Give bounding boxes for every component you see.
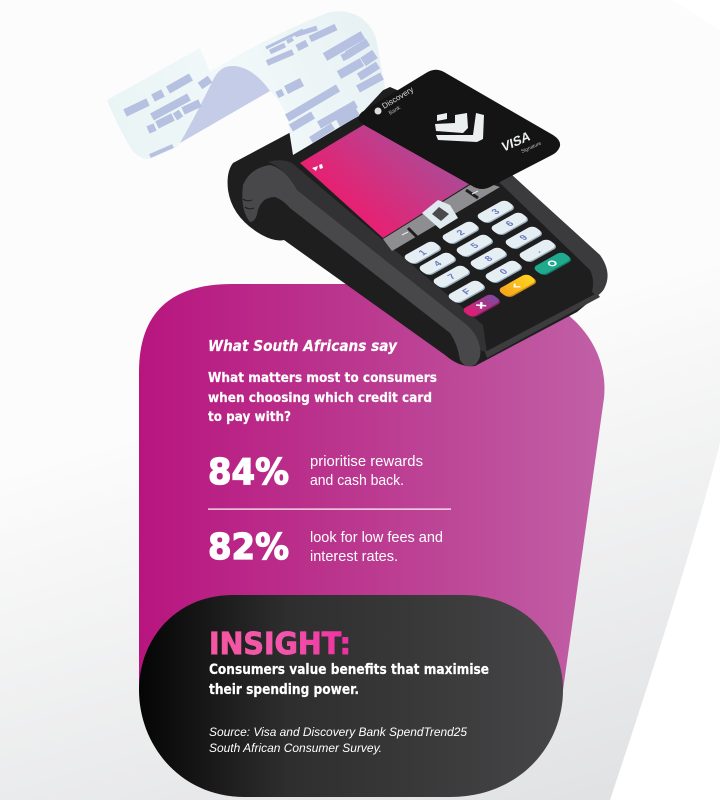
stat: 84 percent: and cash back.: [310, 473, 404, 489]
navigation pad: [422, 200, 458, 229]
question text: What matters most to consumers: [208, 370, 437, 386]
question text: when choosing which credit card: [208, 390, 432, 406]
keypad: 0: [497, 267, 511, 277]
insight text: [209, 662, 489, 698]
keypad: 7: [445, 272, 459, 282]
heading: insight: INSIGHT:: [209, 627, 351, 662]
question text: [208, 370, 437, 425]
stat: 82 percent: look for low fees and: [310, 530, 443, 546]
keypad: 8: [482, 254, 496, 264]
card bank name: [374, 85, 415, 117]
terminal screen: [300, 118, 495, 238]
panel: magenta survey card: [139, 284, 604, 690]
keypad: F: [460, 287, 474, 297]
keypad: .: [532, 247, 544, 255]
card bank name: Bank: [388, 105, 402, 117]
source note: Source: Visa and Discovery Bank SpendTrend25: [209, 727, 468, 739]
keypad: 5: [468, 241, 482, 251]
illustration: printed receipt: [107, 11, 385, 159]
question text: to pay with?: [208, 409, 291, 425]
heading: What South Africans say: What South Africans say: [208, 337, 398, 355]
keypad: 6: [503, 219, 517, 229]
card Visa mark: VISA: [500, 128, 532, 155]
keypad: [402, 199, 573, 319]
stat: 82 percent: interest rates.: [310, 549, 398, 565]
panel: dark insight pill: [139, 595, 563, 797]
stat: 84 percent: [208, 452, 423, 493]
function button strip: [383, 180, 500, 251]
insight text: Consumers value benefits that maximise: [209, 662, 489, 678]
stat: 84 percent: prioritise rewards: [310, 454, 423, 470]
keypad: 1: [416, 248, 430, 258]
stat: 82 percent: 82%: [208, 527, 289, 568]
card logo: [435, 113, 484, 142]
keypad: 2: [454, 228, 468, 238]
keypad: 4: [431, 259, 445, 269]
keypad: 9: [517, 233, 531, 243]
receipt underside: [180, 66, 270, 143]
illustration: payment terminal: [228, 87, 608, 366]
receipt print blocks: [125, 27, 382, 156]
source note: South African Consumer Survey.: [209, 743, 382, 755]
insight text: their spending power.: [209, 682, 359, 698]
card Visa mark: Signature: [520, 141, 543, 155]
source note: [209, 727, 468, 755]
illustration: Discovery Bank Visa card: [358, 70, 560, 189]
card bank name: Discovery: [380, 85, 415, 111]
keypad: 3: [489, 207, 503, 217]
stat: 82 percent: [208, 527, 443, 568]
stat: 84 percent: 84%: [208, 452, 289, 493]
